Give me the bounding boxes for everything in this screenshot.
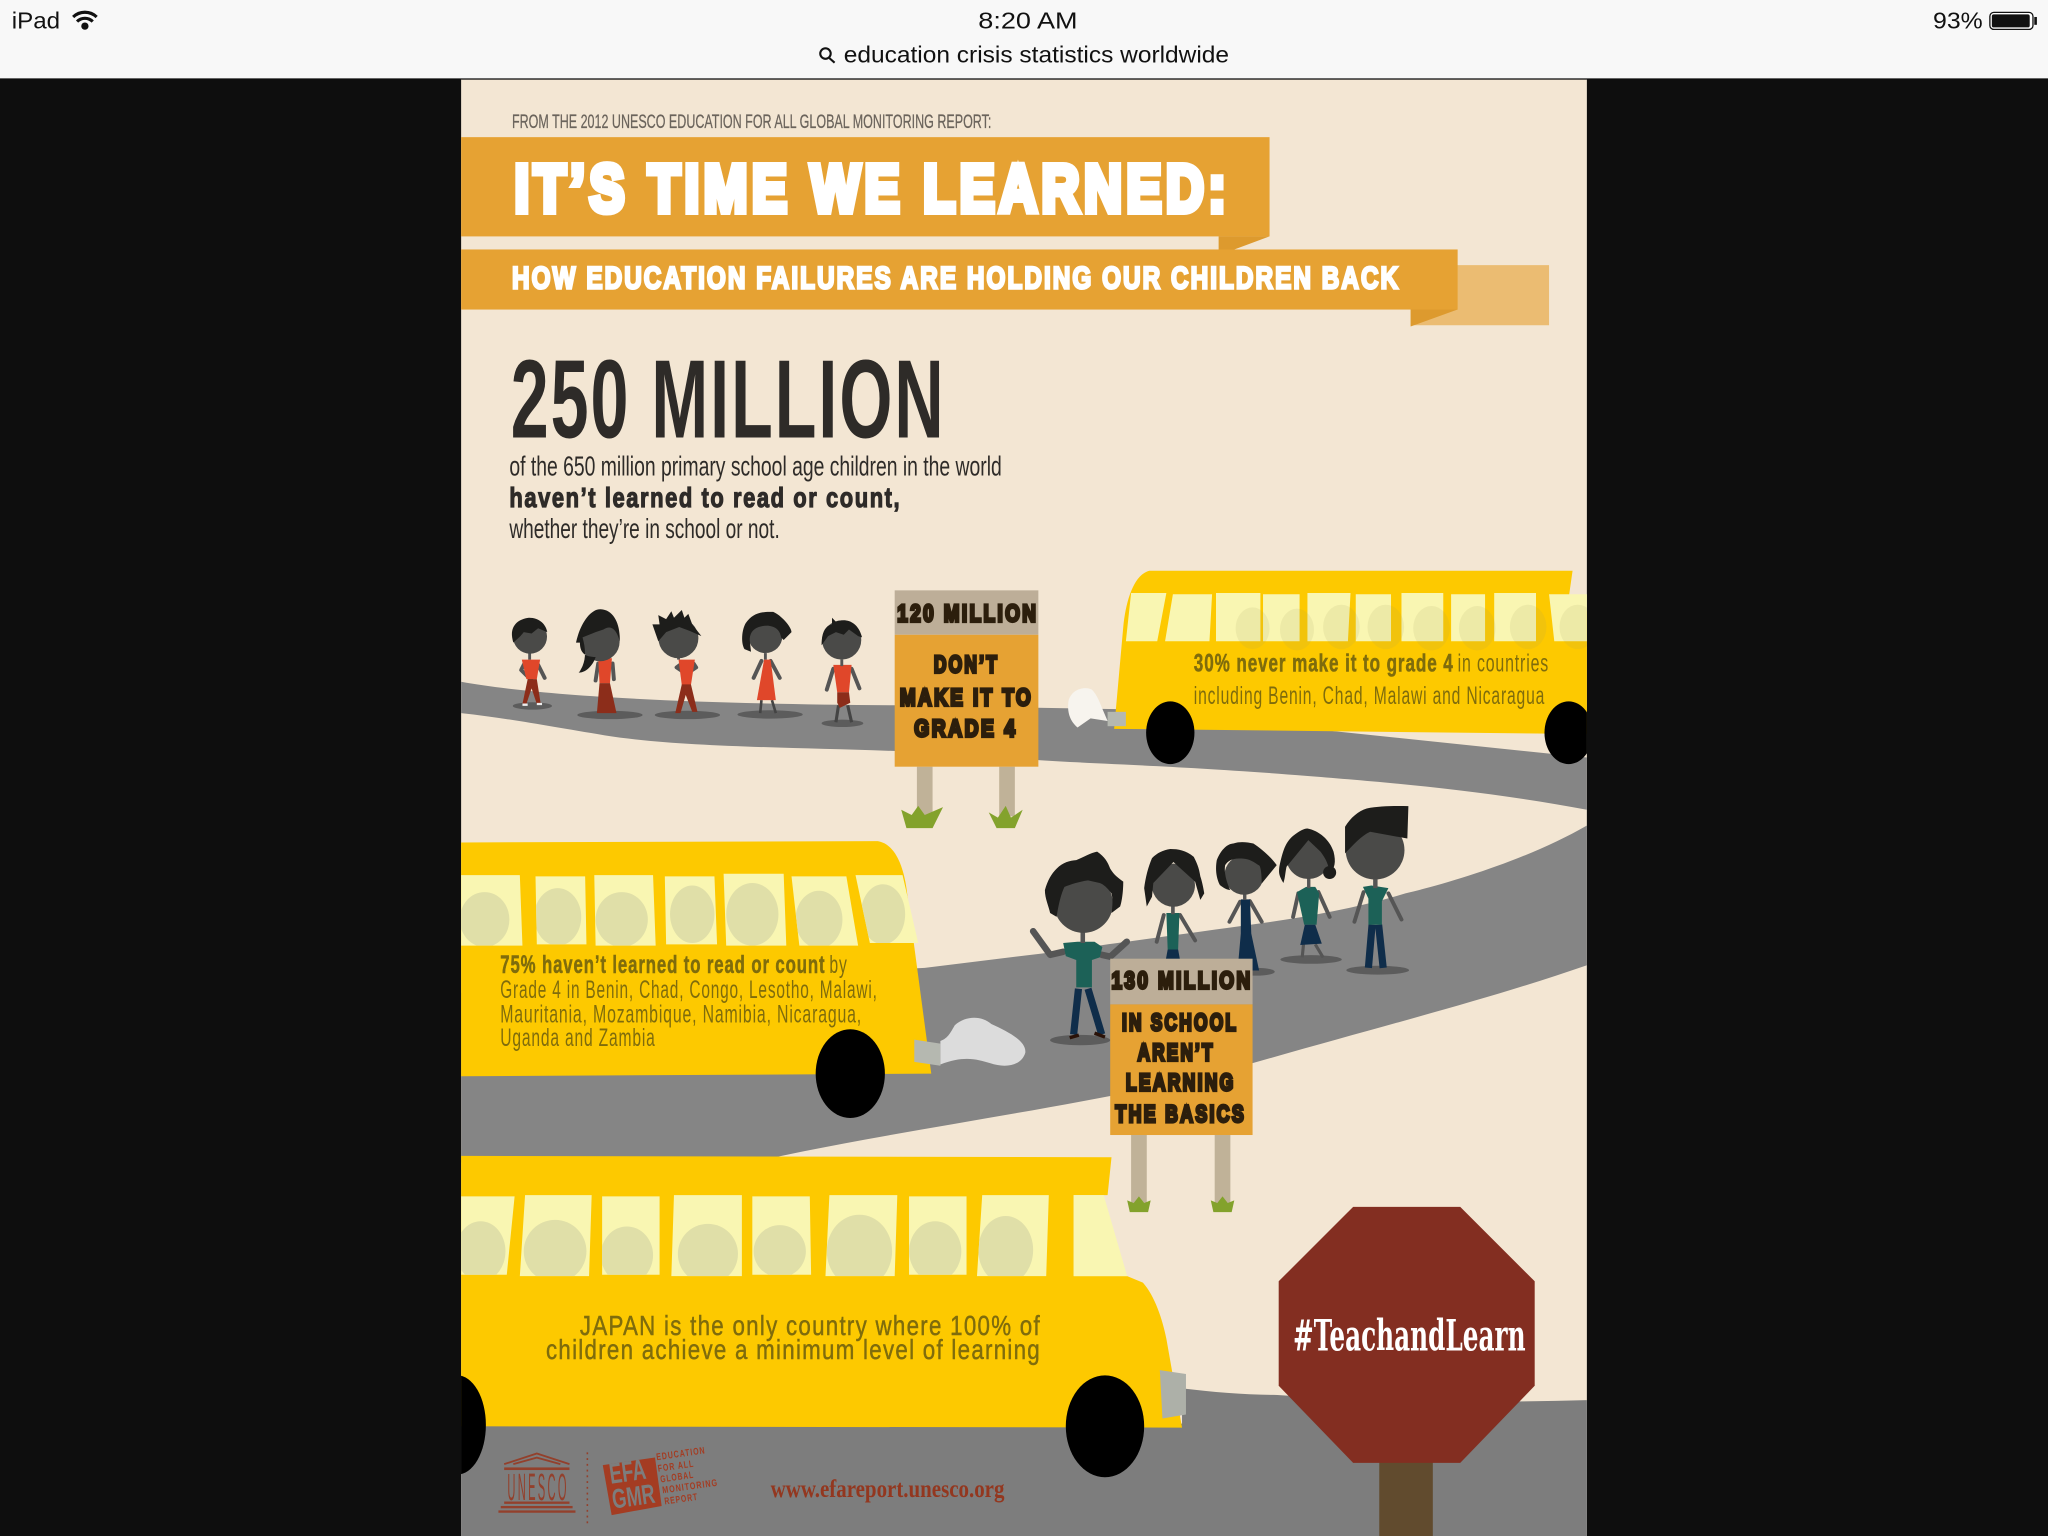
sign pole bbox=[1379, 1460, 1433, 1536]
browser status bar bbox=[0, 0, 2048, 78]
logo: EFA GMR bbox=[603, 1445, 719, 1515]
wheel bbox=[816, 1029, 885, 1118]
child 2 bbox=[576, 609, 643, 719]
subtitle banner bbox=[461, 249, 1458, 310]
logo: EFA GMR: FOR ALL bbox=[657, 1459, 695, 1475]
icon: battery bbox=[1990, 12, 2037, 29]
sign text: 120 MILLION bbox=[897, 601, 1038, 628]
child 5 bbox=[1279, 828, 1342, 964]
child 5 bbox=[822, 618, 863, 727]
source line: FROM THE 2012 UNESCO EDUCATION FOR ALL GLOBAL MONITORING REPORT: bbox=[512, 111, 991, 133]
bus text: Mauritania, Mozambique, Namibia, Nicaragua, bbox=[500, 1002, 862, 1029]
exhaust bbox=[914, 1018, 1025, 1066]
children group: out of school bbox=[512, 609, 863, 727]
bus text bbox=[500, 952, 878, 1052]
passengers bbox=[456, 1215, 1033, 1288]
hashtag: #TeachandLearn bbox=[1293, 1312, 1526, 1362]
bus text: 30% never make it to grade 4 bbox=[1194, 650, 1454, 677]
passengers bbox=[460, 883, 905, 948]
exhaust bbox=[1068, 688, 1126, 728]
bus 2 bbox=[460, 841, 1025, 1118]
child 1 bbox=[512, 618, 552, 710]
bus text: by bbox=[829, 952, 848, 979]
road: middle bbox=[461, 825, 1587, 1162]
device label: iPad bbox=[12, 8, 60, 34]
sign text: AREN’T bbox=[1138, 1040, 1215, 1067]
battery percent: 93% bbox=[1933, 8, 1983, 34]
child 4 bbox=[737, 612, 803, 719]
sign text: IN SCHOOL bbox=[1122, 1010, 1238, 1037]
signpost: 120 million bbox=[895, 590, 1038, 828]
logo: UNESCO bbox=[498, 1453, 575, 1513]
poster panel bbox=[428, 78, 1596, 1536]
logo: EFA GMR: EDUCATION bbox=[656, 1445, 706, 1463]
icon: search bbox=[820, 48, 835, 63]
icon: wifi bbox=[73, 12, 97, 28]
subtitle: HOW EDUCATION FAILURES ARE HOLDING OUR CHILDREN BACK bbox=[512, 261, 1400, 296]
child 4 bbox=[1216, 842, 1277, 976]
bus text: 75% haven’t learned to read or count bbox=[500, 952, 825, 979]
bumper bbox=[1160, 1370, 1186, 1418]
sign text: MAKE IT TO bbox=[900, 684, 1033, 711]
bus windows bbox=[461, 874, 918, 946]
signpost: 130 million bbox=[1110, 959, 1253, 1212]
sign text: DON’T bbox=[934, 652, 999, 679]
road: bottom bbox=[461, 1388, 1587, 1536]
ribbon folds bbox=[1219, 236, 1549, 327]
website url: www.efareport.unesco.org bbox=[771, 1476, 1005, 1503]
wheels bbox=[1146, 701, 1593, 764]
bus text: including Benin, Chad, Malawi and Nicaragua bbox=[1194, 683, 1545, 710]
bus windows bbox=[1126, 593, 1587, 641]
logo: EFA GMR: EFA bbox=[607, 1454, 648, 1491]
sign legs bbox=[1131, 1135, 1230, 1206]
logo: EFA GMR: GLOBAL bbox=[660, 1470, 695, 1485]
statistic description bbox=[509, 450, 1002, 544]
child 3 bbox=[652, 610, 720, 719]
sign text: LEARNING bbox=[1126, 1070, 1236, 1097]
bus text bbox=[546, 1310, 1041, 1365]
logo divider bbox=[586, 1452, 588, 1526]
wheels bbox=[428, 1375, 1144, 1477]
statistic description: haven’t learned to read or count, bbox=[509, 482, 901, 513]
octagon bbox=[1279, 1207, 1535, 1463]
bus 1 bbox=[1068, 571, 1596, 764]
stop sign bbox=[1279, 1207, 1535, 1536]
grass tufts bbox=[901, 806, 1023, 828]
sign legs bbox=[917, 767, 1015, 816]
sign text bbox=[897, 601, 1038, 743]
bus text bbox=[1194, 650, 1549, 710]
logo: EFA GMR: REPORT bbox=[664, 1492, 699, 1507]
statistic description: of the 650 million primary school age children in the world bbox=[509, 450, 1002, 481]
child 2 bbox=[1033, 852, 1127, 1045]
faint passengers bbox=[1236, 605, 1596, 650]
logo: EFA GMR: MONITORING bbox=[662, 1478, 719, 1496]
bus windows bbox=[461, 1195, 1127, 1276]
bus text: Uganda and Zambia bbox=[500, 1025, 656, 1052]
child 6 bbox=[1345, 806, 1409, 975]
search query: education crisis statistics worldwide bbox=[844, 42, 1229, 68]
title: IT’S TIME WE LEARNED: bbox=[515, 153, 1230, 227]
sign text: 130 MILLION bbox=[1112, 968, 1253, 995]
clock: 8:20 AM bbox=[978, 8, 1078, 34]
bus text: Grade 4 in Benin, Chad, Congo, Lesotho, Malawi, bbox=[500, 977, 878, 1004]
title banner bbox=[461, 137, 1270, 236]
bus text: children achieve a minimum level of learning bbox=[546, 1334, 1041, 1365]
children group: in school bbox=[1033, 806, 1409, 1045]
sign text bbox=[1112, 968, 1253, 1128]
bus text: JAPAN is the only country where 100% of bbox=[580, 1310, 1041, 1341]
sign text: THE BASICS bbox=[1115, 1101, 1246, 1128]
logo: EFA GMR: GMR bbox=[610, 1478, 657, 1515]
statistic description: whether they’re in school or not. bbox=[509, 513, 780, 544]
grass tufts bbox=[1127, 1196, 1234, 1212]
sign text: GRADE 4 bbox=[914, 716, 1017, 743]
bus text: in countries bbox=[1458, 650, 1549, 677]
road: top bbox=[461, 682, 1587, 810]
bus 3 bbox=[428, 1156, 1186, 1477]
headline statistic: 250 MILLION bbox=[511, 337, 946, 462]
child 3 bbox=[1144, 849, 1204, 959]
poster panel: UNESCO bbox=[507, 1467, 569, 1509]
